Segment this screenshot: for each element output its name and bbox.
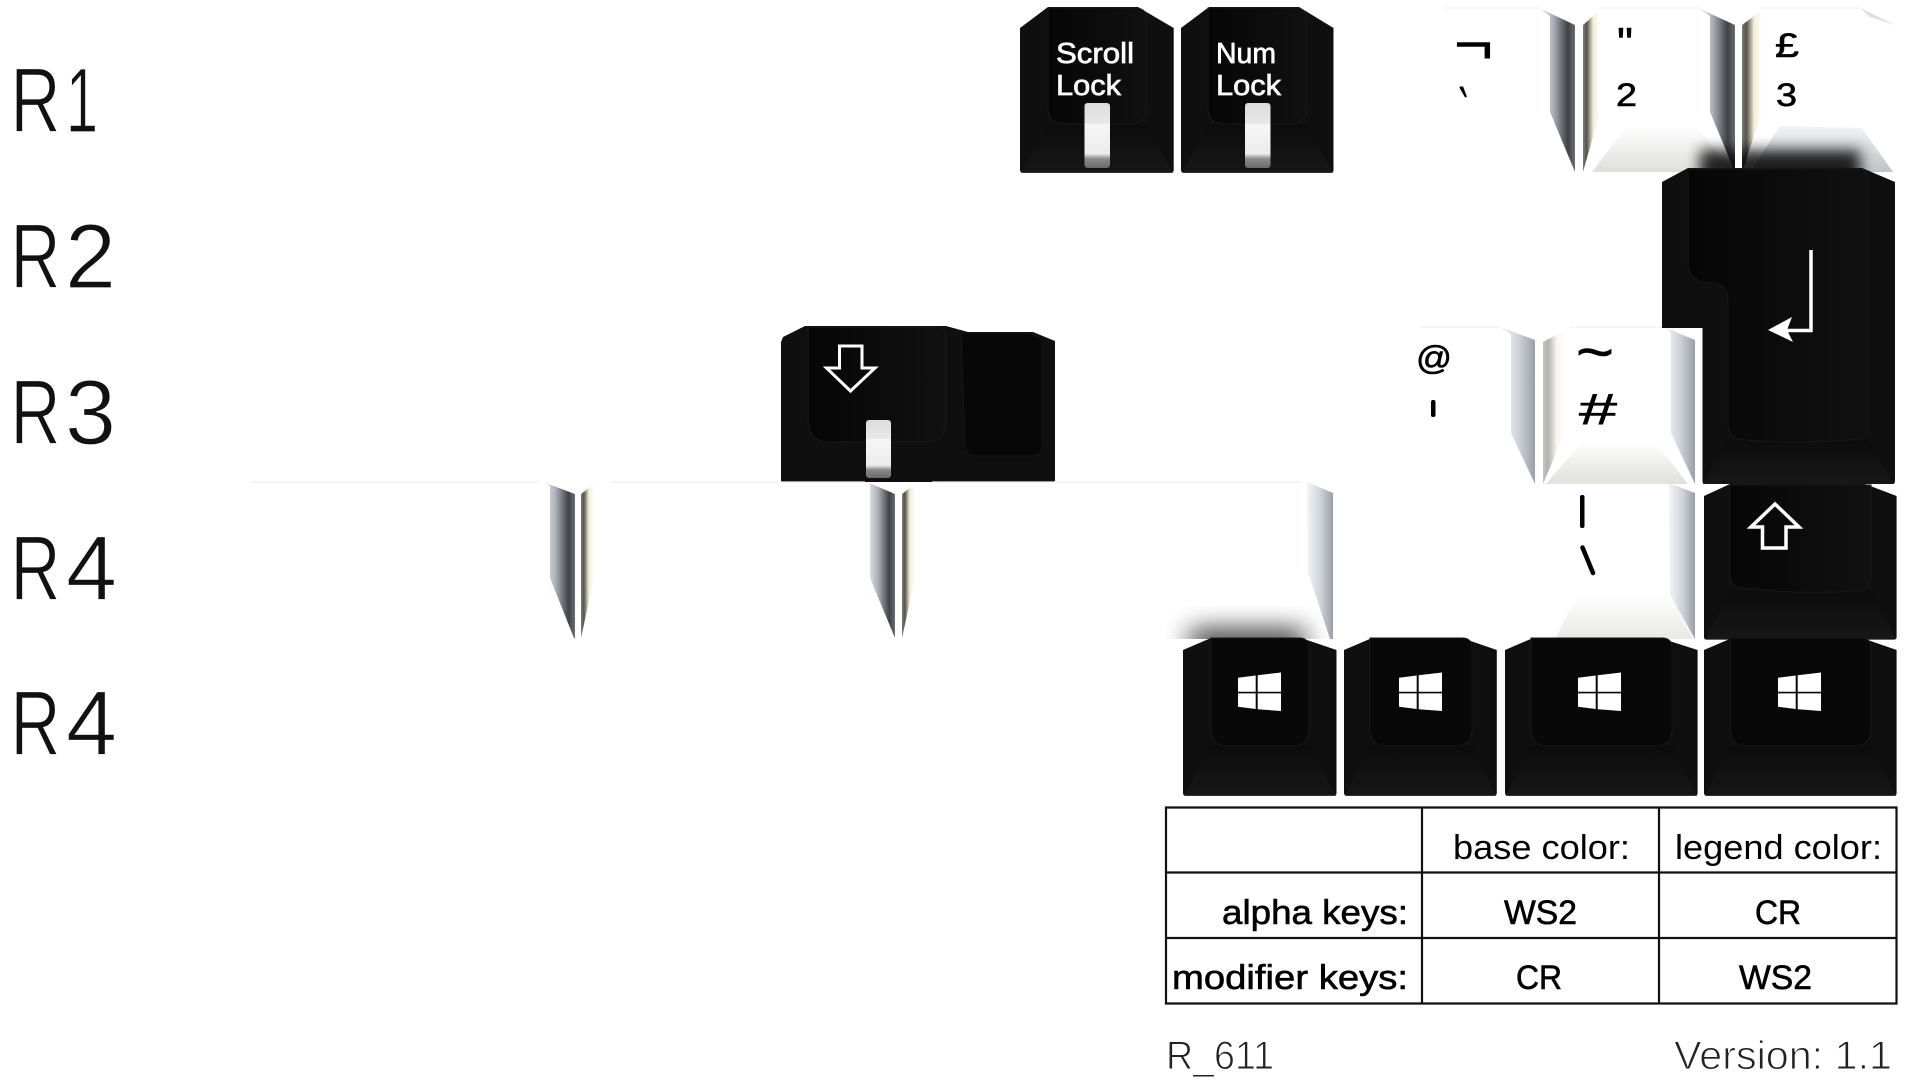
- row header: modifier keys: modifier keys:: [1172, 959, 1408, 997]
- row label R4: R: [10, 518, 60, 620]
- skirt: [1703, 440, 1894, 484]
- legend: not sign: ¬: [1454, 12, 1493, 75]
- row header: alpha keys: alpha keys:: [1222, 894, 1408, 932]
- icon: windows logo: [1578, 672, 1621, 711]
- key: 2: [1583, 8, 1735, 172]
- second key top face: [961, 333, 1042, 456]
- top face: [1211, 638, 1309, 746]
- bottom row white key A: [250, 482, 575, 638]
- top face: [1208, 8, 1307, 124]
- row label R4: 4: [66, 518, 117, 620]
- row label R2: 2: [65, 206, 116, 308]
- skirt: [1184, 746, 1336, 796]
- legend: double quote: ": [1617, 19, 1633, 68]
- row label R2: [10, 206, 116, 308]
- bottom row white key C: [902, 482, 1333, 639]
- legend: Scroll: [1056, 38, 1134, 70]
- cell: alpha base: WS2: [1504, 894, 1577, 932]
- legend: at sign: @: [1416, 339, 1452, 376]
- key: down arrow with stepped double shape: [781, 326, 1055, 482]
- legend: tilde: ~: [1576, 320, 1614, 385]
- key top face: [808, 327, 946, 442]
- key: 3: [1742, 8, 1895, 172]
- row label R1: 1: [66, 50, 98, 152]
- icon: windows logo: [1399, 672, 1442, 711]
- icon: windows logo: [1778, 672, 1821, 711]
- top face: [1048, 8, 1147, 124]
- skirt: [1705, 591, 1896, 639]
- legend: hash: #: [1579, 385, 1618, 434]
- key: Windows 1: [1183, 638, 1336, 796]
- key: Scroll Lock: [1020, 7, 1174, 173]
- cell: modifier base: CR: [1516, 959, 1562, 997]
- legend: hyphen: [1431, 400, 1436, 417]
- icon: windows logo: [1238, 672, 1281, 711]
- cell: modifier legend: WS2: [1739, 959, 1812, 997]
- icon: up arrow: [1751, 504, 1799, 548]
- row label R4: [10, 518, 117, 620]
- legend: backslash: [1582, 548, 1593, 573]
- skirt: [1506, 746, 1697, 796]
- icon: down arrow: [826, 346, 875, 391]
- bottom row white key B: [581, 482, 895, 638]
- set code: R_611: [1166, 1034, 1274, 1078]
- legend: Num: [1216, 38, 1276, 70]
- key: Num Lock: [1181, 7, 1334, 173]
- skirt: [1705, 746, 1896, 796]
- skirt: [1021, 124, 1173, 173]
- top face: [1730, 638, 1871, 746]
- legend: pound: £: [1775, 27, 1799, 65]
- shadow cast by enter key: [1592, 126, 1893, 172]
- legend second line: Lock: [1216, 70, 1282, 102]
- version: Version: 1.1: [1674, 1034, 1892, 1078]
- row label R1: R: [10, 50, 60, 152]
- top face: [1531, 638, 1672, 746]
- key: backtick: [1445, 8, 1575, 172]
- material table: [1166, 808, 1896, 1004]
- legend: pipe: [1580, 495, 1584, 528]
- top face: [1688, 169, 1868, 442]
- legend: 3: 3: [1776, 77, 1797, 113]
- key: Enter: [1662, 168, 1895, 484]
- row label R2: R: [10, 206, 60, 308]
- top face: [1730, 485, 1871, 592]
- header: legend color: legend color:: [1675, 829, 1882, 867]
- key: hyphen: [1416, 327, 1535, 484]
- light pipe: [1245, 103, 1270, 168]
- key: backtick: `: [1458, 76, 1469, 152]
- skirt: [1345, 746, 1496, 796]
- light pipe: [866, 420, 891, 478]
- row label R4 second: 4: [66, 673, 117, 775]
- light pipe: [1084, 103, 1110, 168]
- key: Shift: [1704, 484, 1897, 640]
- row label R4 second: R: [10, 673, 60, 775]
- key: Windows 3: [1505, 638, 1698, 796]
- key: backslash: [1550, 483, 1695, 639]
- row label R3: [10, 362, 116, 464]
- shadow on spacebar-row key from windows key: [1190, 630, 1305, 654]
- icon: return arrow: [1785, 250, 1811, 330]
- cell: alpha legend: CR: [1755, 894, 1801, 932]
- key: hash: [1543, 320, 1695, 484]
- key: Windows 4: [1704, 638, 1897, 796]
- header: base color: base color:: [1453, 829, 1630, 867]
- top face: [1370, 638, 1472, 746]
- row label R3: 3: [65, 362, 116, 464]
- skirt: [1182, 124, 1333, 173]
- row label R3: R: [10, 362, 60, 464]
- row label R4 second: [10, 673, 117, 775]
- legend: 2: 2: [1616, 77, 1637, 113]
- legend second line: Lock: [1056, 70, 1122, 102]
- key: Windows 2: [1344, 638, 1497, 796]
